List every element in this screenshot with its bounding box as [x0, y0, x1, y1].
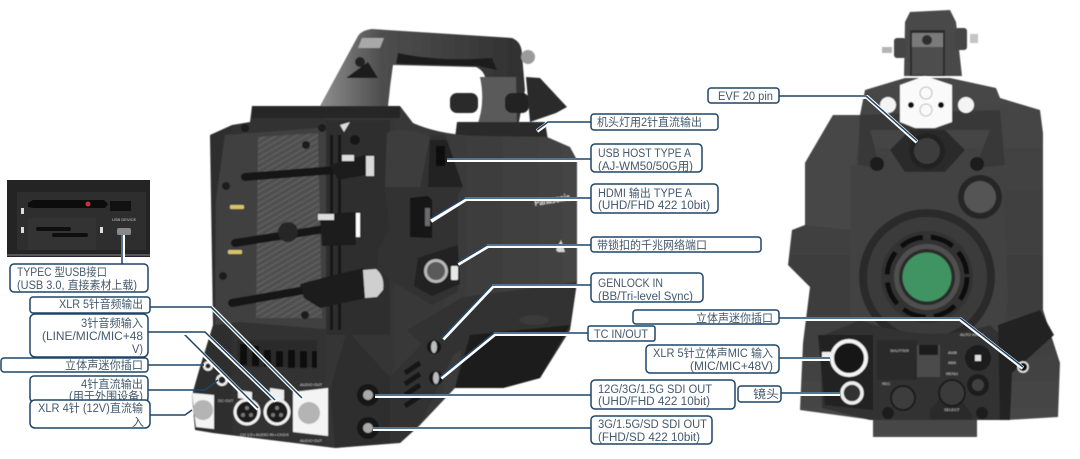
label: 4-pin DC output	[30, 376, 148, 403]
label: 12G SDI out: (UHD/FHD 422 10bit)	[598, 396, 710, 408]
viewfinder mount and knobs	[476, 77, 517, 128]
label: XLR 4-pin DC in	[30, 400, 150, 429]
ethernet port recess	[414, 245, 460, 296]
label: TC IN/OUT	[588, 326, 655, 341]
label: stereo mini jack left: 立体声迷你插口	[65, 358, 143, 372]
viewfinder head	[904, 10, 962, 76]
label: TC IN/OUT: TC IN/OUT	[594, 329, 648, 341]
label: 2-pin DC out for light: 机头灯用2针直流输出	[597, 115, 702, 129]
mounting plate	[900, 76, 952, 128]
label: gigabit ethernet	[591, 237, 761, 252]
leader lines	[122, 96, 1023, 429]
label: GENLOCK IN	[591, 273, 703, 303]
brand text on body: Panasonic	[534, 192, 571, 209]
label: XLR 5-pin stereo mic in: (MIC/MIC+48V)	[690, 361, 773, 373]
label: USB HOST	[591, 144, 702, 173]
lens connector	[842, 383, 862, 403]
inset photo: USB device panel: USB DEVICE	[112, 217, 137, 222]
label: 3-pin audio in: (LINE/MIC/MIC+48	[42, 331, 143, 343]
stereo mini jack	[1018, 362, 1028, 372]
label: 2-pin DC out for light	[591, 114, 718, 130]
label: 4-pin DC output: (用于外围设备)	[69, 389, 143, 403]
label: lens: 镜头	[753, 387, 779, 401]
label: 4-pin DC output: 4针直流输出	[81, 377, 143, 391]
shoulder pad	[407, 282, 577, 388]
label: XLR 5-pin stereo mic in: XLR 5针立体声MIC 输入	[653, 346, 773, 360]
right camera, front view: SHUTTER	[890, 348, 909, 353]
top knob and bolts	[909, 133, 945, 169]
label: lens	[738, 386, 781, 402]
right camera, front view: AUTO W/BAL	[960, 332, 985, 337]
label: 12G SDI out	[591, 380, 735, 409]
lower control panel	[820, 320, 1005, 420]
right camera, front view: MENU	[946, 371, 958, 376]
central column	[326, 120, 390, 335]
label: 3G SDI out: (FHD/SD 422 10bit)	[598, 432, 700, 444]
label: 3G SDI out	[591, 416, 712, 444]
label: stereo mini jack left	[1, 358, 148, 372]
left camera, rear three-quarter view	[192, 29, 577, 448]
sensor	[902, 252, 952, 302]
xlr mic input	[832, 341, 866, 375]
label: XLR 4-pin DC in: XLR 4针 (12V)直流输	[38, 401, 143, 415]
label: XLR 4-pin DC in: 入	[132, 416, 145, 429]
label: HDMI	[591, 184, 718, 213]
right camera, front view: AWB	[948, 350, 957, 355]
label: XLR 5-pin stereo mic in	[646, 345, 779, 373]
right camera, front view: REC	[882, 381, 891, 386]
label: XLR 5-pin audio out	[30, 297, 150, 313]
label: 12G SDI out: 12G/3G/1.5G SDI OUT	[598, 384, 712, 396]
inset photo: USB device panel	[7, 180, 150, 257]
label: EVF 20 pin: EVF 20 pin	[718, 91, 773, 103]
audio and power connector plates	[192, 393, 214, 429]
label: TYPEC USB: (USB 3.0, 直接素材上载)	[17, 278, 137, 292]
sdi connectors	[357, 384, 379, 406]
label: 3-pin audio in: V)	[132, 344, 143, 356]
label: gigabit ethernet: 带锁扣的千兆网络端口	[597, 238, 707, 252]
label: HDMI: HDMI 输出 TYPE A	[598, 186, 692, 200]
rear vents	[237, 340, 317, 367]
lens mount	[859, 209, 995, 345]
left camera, rear three-quarter view: AUDIO OUT	[300, 382, 323, 387]
main body	[192, 106, 577, 448]
label: stereo mini jack right	[633, 310, 779, 325]
label: stereo mini jack right: 立体声迷你插口	[696, 311, 773, 325]
body	[788, 78, 1060, 437]
label: HDMI: (UHD/FHD 422 10bit)	[598, 200, 710, 212]
right camera, front view: SELECT	[944, 407, 960, 412]
left camera, rear three-quarter view: DC OUT	[218, 398, 234, 403]
left camera, rear three-quarter view: AUDIO OUT	[300, 438, 323, 443]
label: GENLOCK IN: GENLOCK IN	[598, 278, 663, 290]
label: USB HOST: (AJ-WM50/50G用)	[598, 161, 693, 173]
label: XLR 5-pin audio out: XLR 5针音频输出	[59, 297, 143, 311]
label: GENLOCK IN: (BB/Tri-level Sync)	[598, 291, 693, 303]
right camera, front view	[788, 10, 1060, 437]
right camera, front view: ABB	[948, 360, 956, 365]
lower rear block	[330, 330, 390, 448]
handle	[320, 29, 525, 132]
label: 3-pin audio in	[30, 314, 148, 357]
label: 3-pin audio in: 3针音频输入	[81, 316, 143, 330]
label: TYPEC USB	[10, 264, 148, 292]
label: TYPEC USB: TYPEC 型USB接口	[17, 265, 107, 279]
cables	[245, 170, 335, 177]
label: USB HOST: USB HOST TYPE A	[598, 148, 691, 160]
left camera, rear three-quarter view: CH 1/3 • AUDIO IN • CH2/4	[240, 432, 289, 437]
label: EVF 20 pin	[708, 88, 779, 103]
front side cover	[378, 130, 463, 305]
label: 3G SDI out: 3G/1.5G/SD SDI OUT	[598, 419, 707, 431]
hdmi recess	[410, 196, 432, 238]
rear battery plate	[215, 127, 335, 330]
